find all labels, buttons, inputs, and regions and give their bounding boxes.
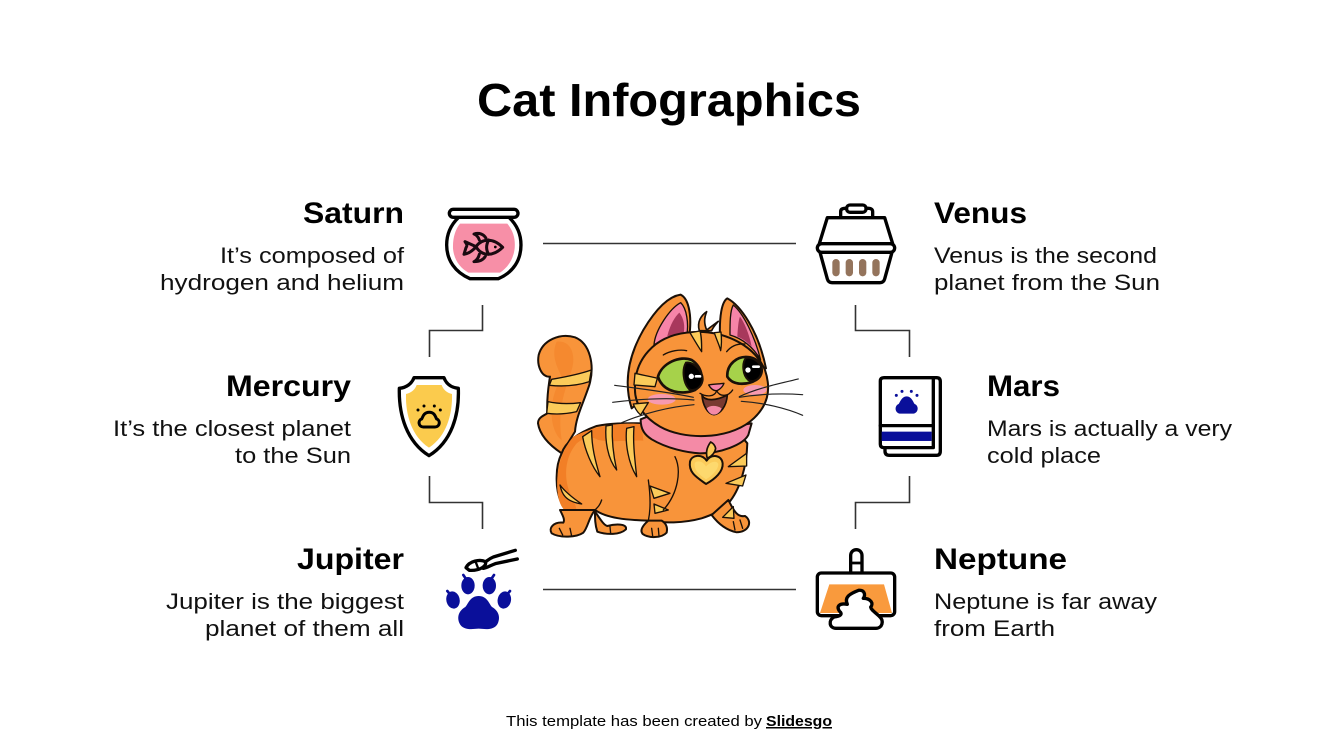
text block: Saturn: It’s composed of	[220, 243, 405, 268]
cat body detail	[595, 457, 678, 521]
text block: Neptune	[934, 543, 1157, 641]
cat cheeks	[648, 385, 767, 405]
icon: fish bowl	[447, 209, 521, 279]
text block: Mars	[987, 370, 1232, 468]
icon: dustpan with litter	[817, 550, 895, 628]
text block: Saturn	[160, 197, 405, 295]
cat whiskers	[613, 379, 803, 423]
cat head stripes	[690, 331, 721, 352]
text block: Saturn: Saturn	[303, 197, 404, 230]
text block: Mercury: Mercury	[226, 370, 351, 403]
cat feet	[551, 500, 749, 537]
cat left ear	[628, 295, 690, 408]
text block: Venus	[934, 197, 1160, 295]
icon: book with paw	[880, 378, 940, 455]
text block: Mars: cold place	[987, 443, 1101, 468]
icon: shield with paw	[399, 378, 458, 456]
text block: Mercury: to the Sun	[235, 443, 351, 468]
text block: Saturn: hydrogen and helium	[160, 270, 404, 295]
text block: Neptune: Neptune is far away	[934, 589, 1157, 614]
cat head	[635, 332, 768, 436]
text block: Mars: Mars is actually a very	[987, 416, 1232, 441]
text block: Mercury: It’s the closest planet	[113, 416, 351, 441]
cat right ear	[720, 298, 766, 368]
cat illustration	[538, 295, 803, 537]
cat head tuft	[699, 312, 718, 331]
cat brows	[663, 344, 745, 355]
connector lines	[430, 244, 910, 590]
text block: Jupiter: planet of them all	[205, 616, 404, 641]
text block: Jupiter	[166, 543, 404, 641]
cat body stripes	[560, 425, 747, 513]
text block: Venus: Venus	[934, 197, 1027, 230]
text block: Mars: Mars	[987, 370, 1060, 403]
text block: Jupiter: Jupiter	[297, 543, 404, 576]
cat collar	[641, 415, 752, 453]
cat tail	[538, 336, 592, 453]
text block: Neptune: Neptune	[934, 543, 1067, 576]
footer credit: Slidesgo	[766, 713, 832, 730]
cat heart tag	[690, 442, 723, 484]
title: Cat Infographics	[477, 74, 861, 126]
icon: paw and nail clippers	[445, 550, 517, 629]
text block: Mercury	[113, 370, 351, 468]
text block: Neptune: from Earth	[934, 616, 1055, 641]
icon: pet carrier	[817, 205, 895, 283]
text block: Jupiter: Jupiter is the biggest	[166, 589, 404, 614]
cat nose and mouth	[700, 383, 733, 415]
text block: Venus: Venus is the second	[934, 243, 1157, 268]
cat eyes	[658, 357, 762, 392]
text block: Venus: planet from the Sun	[934, 270, 1160, 295]
footer credit: This template has been created by	[506, 713, 763, 730]
cat body	[557, 423, 747, 522]
